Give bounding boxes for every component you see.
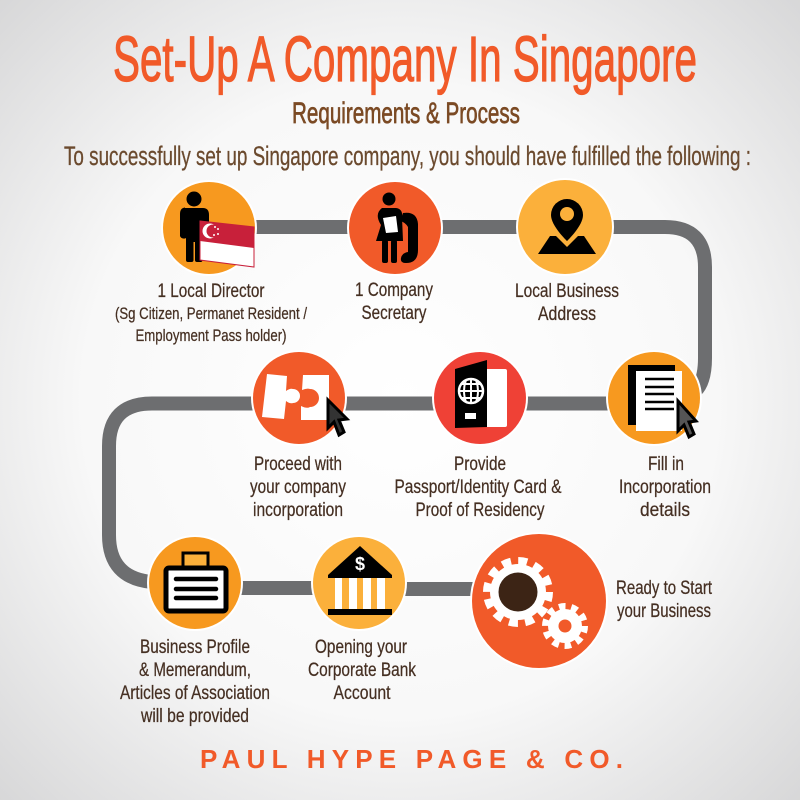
label: company secretary: [355, 280, 433, 324]
label: passport: Provide: [454, 454, 506, 475]
label: passport: [394, 454, 562, 521]
footer brand: PAUL HYPE PAGE & CO.: [200, 744, 623, 774]
label: local director: [115, 281, 307, 345]
label: fill in: Incorporation: [619, 477, 711, 498]
icon: cursor: [328, 400, 347, 435]
address icon circle: [516, 178, 614, 276]
label: bank: Account: [334, 683, 391, 704]
label: ready: Ready to Start: [616, 578, 713, 599]
label: fill in: Fill in: [648, 454, 684, 475]
label: local director: 1 Local Director: [158, 281, 265, 302]
director icon circle: [161, 180, 257, 276]
label: company secretary: 1 Company: [355, 280, 433, 301]
passport icon circle: [432, 350, 528, 446]
label: fill in: details: [640, 500, 690, 521]
label: business profile: will be provided: [140, 706, 249, 727]
icon: puzzle pieces: [262, 374, 300, 419]
icon: map pin: [538, 199, 596, 254]
label: ready: [616, 578, 713, 622]
step: local business address: [516, 178, 614, 276]
briefcase icon circle: [147, 535, 243, 631]
label: bank: Corporate Bank: [308, 660, 416, 681]
icon: Singapore flag: [200, 221, 254, 267]
document icon circle: [606, 350, 702, 446]
icon: large gear: [487, 561, 549, 623]
step: business profile: [147, 535, 243, 631]
step: fill in details: [606, 350, 702, 446]
label: passport: Passport/Identity Card &: [394, 477, 562, 498]
label: ready: your Business: [617, 601, 711, 622]
label: address: Address: [538, 304, 596, 325]
icon: person: [180, 192, 209, 262]
icon: bank: [328, 546, 392, 578]
process connector path: [109, 227, 705, 589]
label: local director: Employment Pass holder): [136, 326, 286, 345]
label: bank: [308, 637, 416, 704]
step: local director: [161, 180, 257, 276]
label: business profile: [120, 637, 270, 727]
icon: briefcase: [183, 553, 208, 567]
label: proceed: your company: [250, 477, 346, 498]
label: business profile: Business Profile: [140, 637, 250, 658]
gears icon circle: [470, 532, 608, 670]
step: ready to start: [470, 532, 608, 670]
label: fill in: [619, 454, 711, 521]
label: business profile: & Memerandum,: [139, 660, 251, 681]
label: proceed: [250, 454, 346, 521]
step: passport: [432, 350, 528, 446]
label: proceed: incorporation: [253, 500, 343, 521]
secretary icon circle: [347, 180, 443, 276]
label: local director: (Sg Citizen, Permanet Resident /: [115, 304, 307, 323]
label: bank: Opening your: [315, 637, 408, 658]
step: company secretary: [347, 180, 443, 276]
icon: secretary with phone: [376, 192, 418, 263]
label: address: Local Business: [515, 281, 619, 302]
label: passport: Proof of Residency: [416, 500, 545, 521]
icon: passport: [483, 369, 507, 427]
bank icon circle: [311, 535, 407, 631]
step: proceed with incorporation: [251, 350, 347, 446]
label: proceed: Proceed with: [254, 454, 342, 475]
puzzle icon circle: [251, 350, 347, 446]
icon: small gear: [546, 606, 584, 646]
step: corporate bank account: [311, 535, 407, 631]
label: business profile: Articles of Association: [120, 683, 270, 704]
step: corporate bank account: $: [355, 554, 365, 574]
label: company secretary: Secretary: [362, 303, 427, 324]
icon: document with cursor: [628, 365, 675, 425]
subtitle: Requirements & Process: [292, 97, 520, 130]
label: address: [515, 281, 619, 325]
